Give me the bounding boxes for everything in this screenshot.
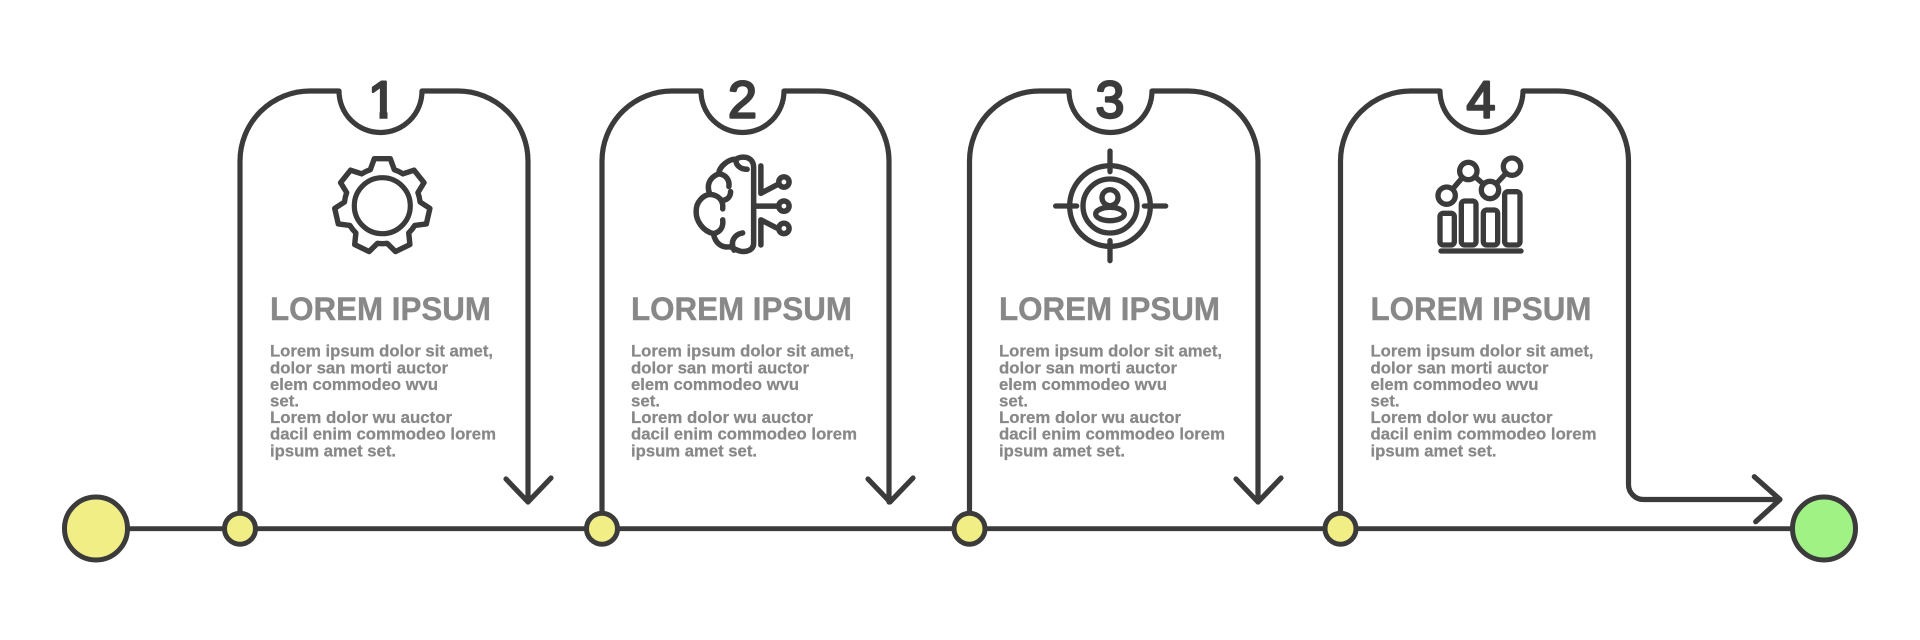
body text 2: dolor san morti auctor (631, 358, 810, 377)
number 2: 2 (728, 72, 757, 130)
body text 3: elem commodeo wvu (999, 375, 1167, 394)
body text 3: Lorem dolor wu auctor (999, 408, 1182, 427)
number 3: 3 (1096, 72, 1124, 130)
body text 3: set. (999, 392, 1028, 411)
start node (64, 497, 128, 560)
body text 1: elem commodeo wvu (270, 375, 438, 394)
body text 2: set. (631, 392, 660, 411)
panel: step 3 (970, 72, 1281, 528)
body text 1: dacil enim commodeo lorem (270, 425, 496, 444)
body text 2 (631, 342, 857, 460)
icon: bar chart with line (1438, 158, 1521, 251)
step node 1 (224, 513, 256, 544)
body text 4: ipsum amet set. (1370, 441, 1496, 460)
body text 1: Lorem dolor wu auctor (270, 408, 453, 427)
body text 2: dacil enim commodeo lorem (631, 425, 857, 444)
heading 2: LOREM IPSUM (631, 291, 852, 327)
number 1: 1 (368, 72, 397, 130)
body text 4: dolor san morti auctor (1370, 358, 1549, 377)
icon: gear (335, 159, 430, 252)
body text 1: ipsum amet set. (270, 441, 396, 460)
heading 3: LOREM IPSUM (999, 291, 1220, 327)
step node 2 (586, 513, 618, 544)
panel: step 2 (602, 72, 913, 528)
timeline axis line (96, 526, 1824, 531)
frame and down arrow 1 (240, 91, 551, 528)
body text 3 (999, 342, 1225, 460)
body text 4: set. (1370, 392, 1400, 411)
step node 3 (954, 513, 985, 544)
body text 4: Lorem dolor wu auctor (1370, 408, 1553, 427)
body text 3: ipsum amet set. (999, 441, 1125, 460)
frame and down arrow 2 (602, 91, 913, 528)
frame and right arrow 4 (1340, 91, 1780, 528)
body text 3: dolor san morti auctor (999, 358, 1178, 377)
end node (1792, 497, 1856, 560)
icon: target with person (1056, 151, 1166, 261)
body text 2: ipsum amet set. (631, 441, 757, 460)
heading 1: LOREM IPSUM (270, 291, 491, 327)
body text 3: Lorem ipsum dolor sit amet, (999, 342, 1222, 361)
body text 4 (1370, 342, 1596, 460)
heading 4: LOREM IPSUM (1370, 291, 1592, 327)
body text 3: dacil enim commodeo lorem (999, 425, 1225, 444)
body text 2: Lorem ipsum dolor sit amet, (631, 342, 854, 361)
body text 1: set. (270, 392, 299, 411)
panel: step 1 (240, 72, 551, 528)
body text 4: Lorem ipsum dolor sit amet, (1370, 342, 1594, 361)
frame and down arrow 3 (970, 91, 1281, 528)
step node 4 (1325, 513, 1356, 544)
icon: brain circuit (696, 157, 789, 251)
timeline infographic (62, 80, 1858, 562)
number 4: 4 (1467, 72, 1495, 130)
body text 1: Lorem ipsum dolor sit amet, (270, 342, 493, 361)
body text 2: Lorem dolor wu auctor (631, 408, 814, 427)
body text 1: dolor san morti auctor (270, 358, 449, 377)
panel: step 4 (1340, 72, 1780, 528)
body text 2: elem commodeo wvu (631, 375, 799, 394)
body text 4: dacil enim commodeo lorem (1370, 425, 1596, 444)
body text 1 (270, 342, 496, 460)
body text 4: elem commodeo wvu (1370, 375, 1538, 394)
